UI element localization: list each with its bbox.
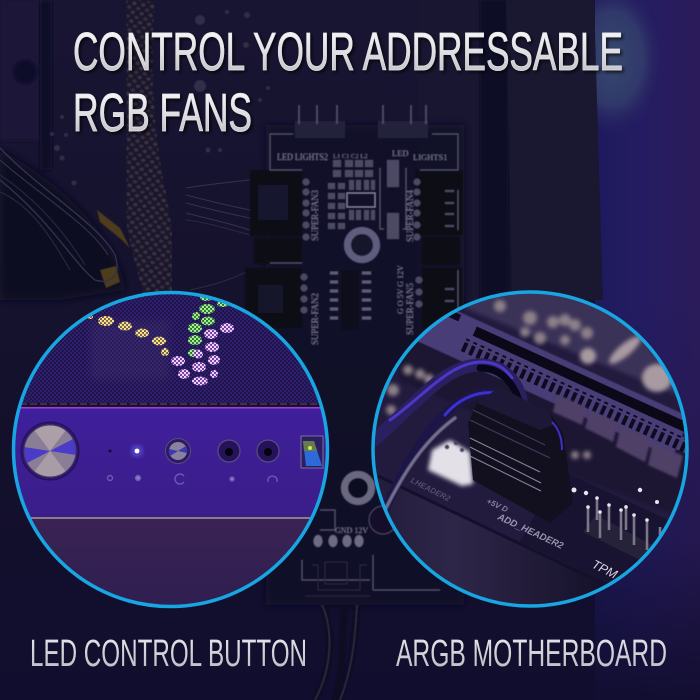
silkscreen text: LIGHTS1 [413,152,447,162]
RGB LED trails [87,295,234,386]
mesh lower edge [22,403,320,407]
bottom wires [315,605,357,700]
PCB fan hub [245,105,464,700]
blurred components [386,300,672,459]
silkscreen text [277,148,447,535]
ARGB connector [468,387,573,523]
blue LED [131,445,143,457]
indicator dot [108,450,112,452]
perforated mesh top [22,294,318,403]
ring [14,292,328,606]
board text: LHEADER2 [409,476,452,504]
board text: +5V D [485,497,510,514]
reset button [166,438,190,464]
silkscreen outlines [270,134,458,590]
silkscreen text: SUPER-FAN3 [310,190,320,241]
table [426,502,568,604]
silkscreen text: GND 12V [335,526,368,535]
audio jacks [218,440,279,462]
silkscreen text: L1 C1 C2 L2 [333,153,368,160]
circle inset: ARGB motherboard [370,290,700,620]
board text: TPM [590,557,620,582]
power button [21,422,79,480]
slot fins [553,394,683,478]
lower mounting hole [344,474,372,502]
wires [374,362,522,512]
circle inset: LED control panel [10,290,330,609]
title: RGB FANS [73,83,252,143]
silkscreen text: SUPER-FAN5 [405,282,415,335]
PCIe slot [418,311,686,454]
white socket [428,440,473,486]
USB port [301,436,323,468]
orange tape [97,210,130,288]
front panel [10,407,330,518]
fan connectors [245,170,463,328]
right side case panel [480,0,700,676]
board lower [520,474,668,583]
silkscreen text: LED [392,148,409,158]
silkscreen text: SUPER-FAN4 [405,190,415,242]
title [73,22,623,143]
dark band under slot [399,342,685,512]
lower solder pads [314,535,364,547]
round component [369,506,397,534]
silkscreen text: SUPER-FAN2 [310,293,320,345]
board text [409,476,620,582]
panel seam [30,517,310,519]
solder pads [300,160,422,314]
header pins [295,121,428,138]
silkscreen text: LED LIGHTS2 [277,152,328,162]
lower connector [305,562,370,596]
TPM pins [572,488,660,560]
IC chip [330,270,371,330]
mounting hole [348,230,376,260]
ring [373,292,687,606]
thin wires left [0,148,250,290]
lower panel [32,519,310,605]
board top area [466,294,675,395]
top left board haze [0,0,270,300]
board text: ADD_HEADER2 [495,511,566,552]
sleeved cables [131,0,168,300]
label: LED control button: LED CONTROL BUTTON [30,633,307,675]
panel icons [108,474,277,484]
silkscreen text: G O 5V G 12V [396,265,405,314]
